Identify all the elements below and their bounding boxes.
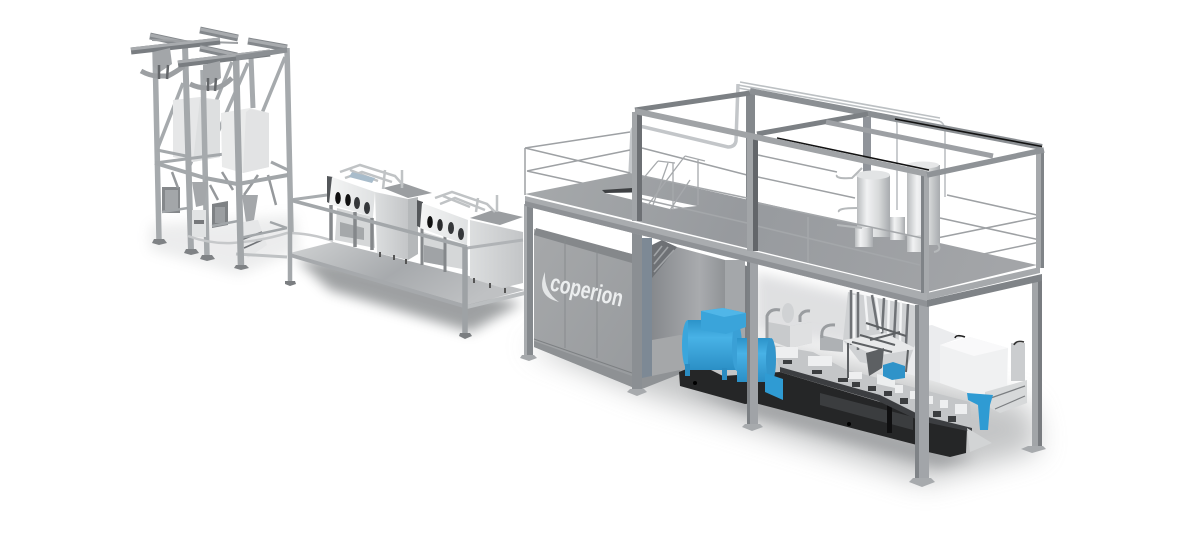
hoist: back <box>141 48 184 79</box>
hoist: front <box>190 61 232 91</box>
rear tank <box>905 325 963 383</box>
small blue gearbox <box>883 362 905 380</box>
platform: pipes behind <box>630 82 945 210</box>
platform lower columns <box>520 204 1046 487</box>
enclosure under platform <box>642 238 747 389</box>
side pump skid <box>985 341 1027 413</box>
logo <box>542 270 626 312</box>
top beams: back <box>131 29 238 51</box>
platform upper columns <box>632 112 1044 293</box>
cyclone: right <box>907 162 940 252</box>
barrel <box>772 345 972 430</box>
control cabinet <box>534 228 632 387</box>
bag: front <box>221 108 269 173</box>
platform: back columns upper <box>746 93 871 203</box>
feeding table: back structure and shelf <box>290 195 525 309</box>
extruder line <box>679 290 1027 457</box>
platform deck <box>525 173 1042 307</box>
stair opening <box>605 193 697 209</box>
bag dump station: front frame <box>152 40 333 270</box>
platform: back rails <box>525 132 1040 265</box>
bag dump station: back frame <box>131 29 253 250</box>
feeder cluster <box>843 290 917 378</box>
feeding table: front rails and legs <box>285 200 523 339</box>
deck right beam <box>927 267 1040 300</box>
side hoppers <box>767 303 843 352</box>
deck front beam <box>525 196 927 307</box>
blue pump <box>967 393 993 430</box>
bag: back <box>173 97 220 162</box>
shelf <box>290 242 525 305</box>
floor shadows <box>150 215 1040 482</box>
top beams: front <box>178 40 287 64</box>
dosing unit 1 <box>327 165 432 264</box>
platform front rails <box>638 175 922 265</box>
foot plates <box>152 239 249 270</box>
dosing unit 2 <box>417 192 523 293</box>
white plate <box>877 374 895 388</box>
cyclone: left <box>837 168 905 247</box>
lower machinery: panels and hoppers <box>162 172 333 258</box>
platform top frame <box>635 91 1044 175</box>
black base <box>679 364 967 457</box>
white tank <box>940 337 1008 397</box>
motor <box>682 308 783 400</box>
stairs and opening rails on deck <box>642 156 705 210</box>
logo: coperion <box>548 270 626 312</box>
staircase <box>652 240 677 278</box>
